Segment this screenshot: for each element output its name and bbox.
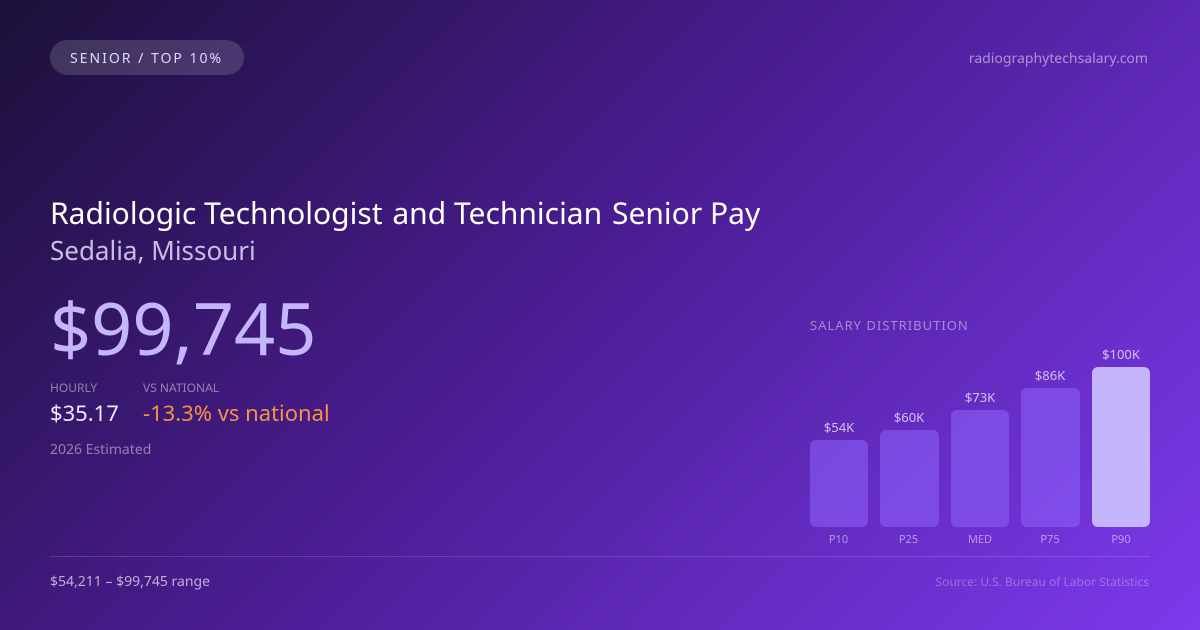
hourly value: $35.17: [50, 398, 119, 428]
bar p10: [810, 440, 868, 527]
value p10: $54K: [824, 418, 854, 436]
headline salary: $99,745: [50, 279, 316, 377]
bar median: [951, 410, 1009, 527]
label p90: P90: [1111, 532, 1131, 547]
hourly label: HOURLY: [50, 379, 97, 396]
bar p25: [880, 430, 939, 527]
vs national value: -13.3% vs national: [143, 398, 330, 428]
label median: MED: [968, 532, 992, 547]
value median: $73K: [965, 388, 995, 406]
badge label: SENIOR / TOP 10%: [70, 49, 223, 68]
site url: radiographytechsalary.com: [969, 49, 1148, 68]
vs national label: VS NATIONAL: [143, 379, 219, 396]
salary distribution chart: [810, 316, 1150, 547]
badge: senior / top 10%: [50, 40, 244, 75]
source: Source: U.S. Bureau of Labor Statistics: [936, 573, 1149, 590]
value p75: $86K: [1035, 366, 1065, 384]
subtitle: Sedalia, Missouri: [50, 232, 256, 268]
salary range: $54,211 – $99,745 range: [50, 572, 210, 591]
title: Radiologic Technologist and Technician Senior Pay: [50, 192, 760, 233]
label p10: P10: [829, 532, 848, 547]
value p25: $60K: [894, 408, 924, 426]
label p25: P25: [899, 532, 918, 547]
bar p90: [1092, 367, 1150, 527]
year note: 2026 Estimated: [50, 440, 151, 459]
bar p75: [1021, 388, 1080, 527]
hourly stat: [50, 379, 119, 428]
value p90: $100K: [1102, 345, 1140, 363]
versus national stat: [143, 379, 330, 428]
label p75: P75: [1040, 532, 1060, 547]
chart heading: SALARY DISTRIBUTION: [810, 316, 969, 334]
